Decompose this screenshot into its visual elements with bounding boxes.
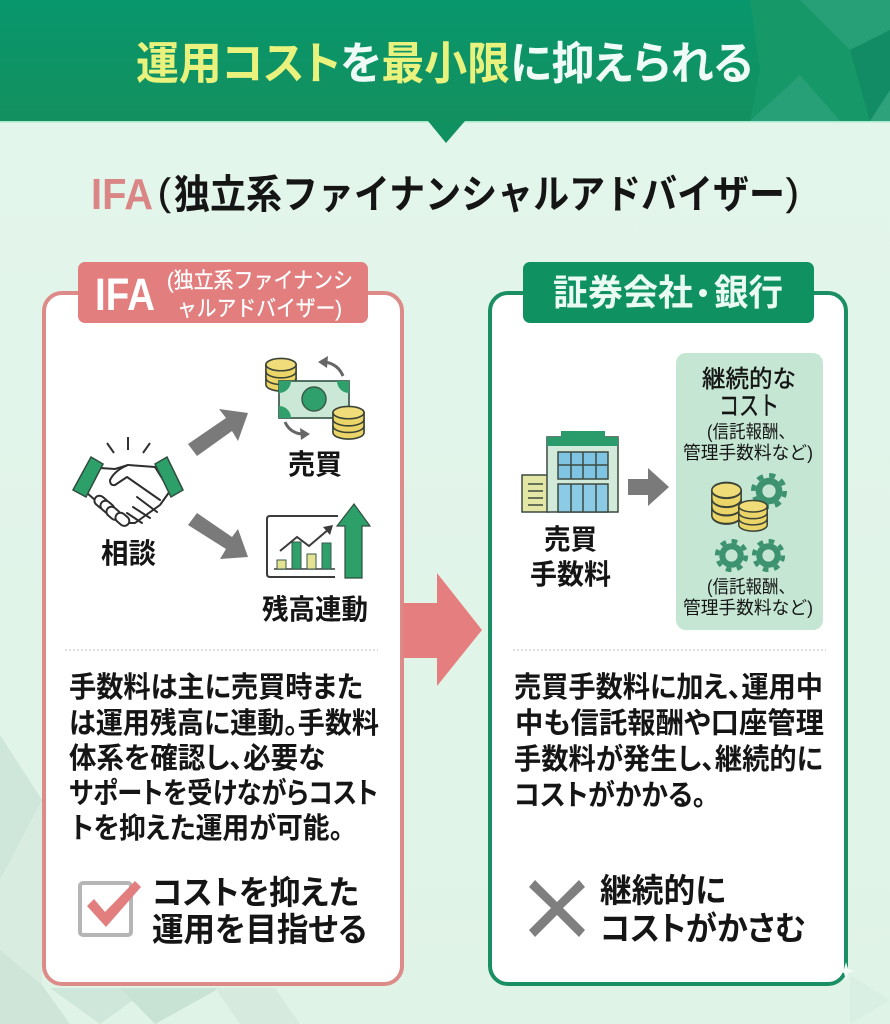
panel: ongoing cost: 継続的な: [702, 366, 796, 393]
icon: money and coins: [266, 356, 364, 440]
header band: [0, 0, 890, 143]
conclusion: securities: コストがかさむ: [600, 910, 806, 947]
panel: ongoing cost: (信託報酬、: [707, 422, 795, 442]
title: 運用コストを最小限に抑えられる: [136, 38, 753, 89]
panel tab: IFA: IFA: [95, 269, 155, 320]
label: 残高連動: 残高連動: [262, 594, 368, 625]
panel tab: IFA: (独立系ファイナンシ: [167, 268, 353, 293]
icon: growth chart: [267, 504, 370, 578]
label: 売買手数料: 手数料: [530, 559, 611, 590]
panel tab: IFA: ャルアドバイザー): [177, 296, 342, 321]
panel: ongoing cost: [676, 353, 823, 630]
arrow: to ongoing cost: [628, 468, 669, 506]
icon: cross: [529, 880, 585, 937]
panel: IFA: [44, 262, 402, 984]
text block: securities description: [514, 671, 824, 812]
label: 売買手数料: 売買: [544, 524, 597, 555]
arrow: to 売買: [188, 409, 248, 456]
text block: securities description: 売買手数料に加え、運用中: [514, 671, 823, 704]
text block: IFA description: サポートを受けながらコスト: [69, 776, 378, 810]
panel tab: IFA: [78, 262, 368, 323]
panel: ongoing cost: 管理手数料など): [683, 443, 813, 463]
sparkle: [837, 962, 855, 980]
icon: checkbox: [80, 881, 141, 935]
subheading: 独立系ファイナンシャルアドバイザー: [174, 173, 785, 217]
label: 売買: 売買: [288, 449, 342, 480]
text block: IFA description: 体系を確認し、必要な: [69, 742, 325, 775]
arrow: to 残高連動: [188, 513, 248, 559]
text block: securities description: 中も信託報酬や口座管理: [515, 707, 824, 740]
icon: handshake: [73, 437, 183, 528]
subheading: (: [158, 172, 171, 214]
conclusion: securities: [600, 872, 806, 947]
panel: ongoing cost: (信託報酬、: [707, 577, 795, 597]
conclusion: IFA: コストを抑えた: [152, 874, 359, 911]
subheading: ): [786, 172, 799, 214]
conclusion: IFA: [152, 874, 367, 948]
text block: IFA description: [69, 671, 379, 845]
text block: IFA description: は運用残高に連動。手数料: [69, 707, 379, 740]
subheading: IFA: [91, 170, 153, 219]
icon: office building: [522, 431, 618, 512]
conclusion: securities: 継続的に: [600, 872, 726, 909]
panel: ongoing cost: 管理手数料など): [683, 598, 813, 618]
panel tab: securities firm and bank: 銀行: [714, 272, 783, 313]
text block: IFA description: トを抑えた運用が可能。: [71, 811, 343, 845]
arrow: comparison: [403, 573, 482, 686]
label: 相談: 相談: [101, 538, 156, 569]
conclusion: IFA: 運用を目指せる: [152, 911, 367, 948]
panel tab: securities firm and bank: 証券会社: [553, 272, 693, 313]
text block: IFA description: 手数料は主に売買時また: [69, 671, 363, 704]
panel: securities firm and bank: [490, 262, 846, 984]
panel tab: securities firm and bank: [523, 262, 814, 323]
label: 売買手数料: [530, 524, 611, 590]
text block: securities description: 手数料が発生し、継続的に: [514, 742, 823, 776]
panel: ongoing cost: コスト: [719, 391, 779, 421]
text block: securities description: コストがかかる。: [514, 778, 706, 812]
icon: coins and gears: [712, 475, 785, 570]
